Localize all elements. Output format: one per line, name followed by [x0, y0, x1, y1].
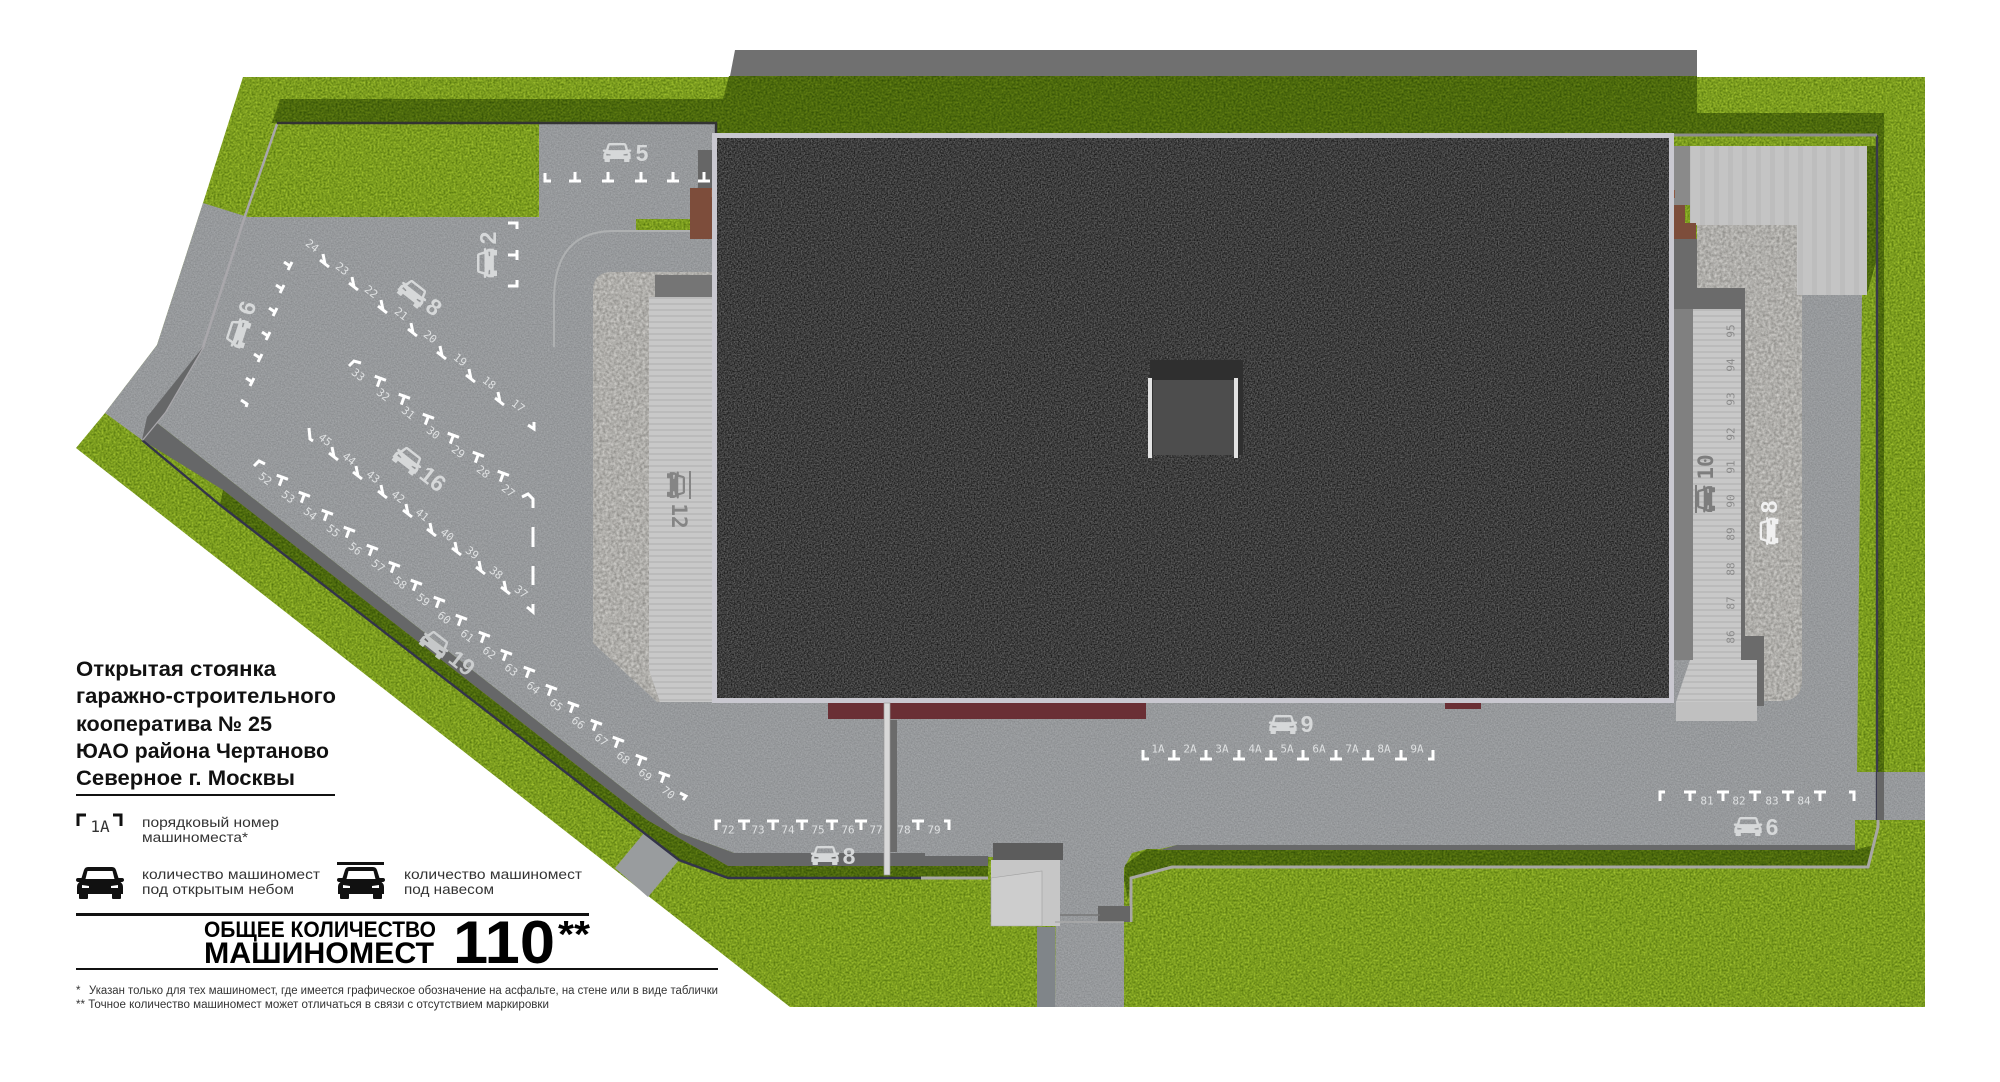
canopy labels 86-95: 95	[1724, 324, 1738, 338]
title rule	[76, 794, 335, 796]
row 24-17 labels: 21	[392, 305, 410, 323]
perimeter wall south-west	[142, 440, 921, 878]
row 24-17 labels: 17	[509, 397, 527, 415]
legend: spot number: машиноместа*	[142, 829, 249, 845]
small lawn strip at entrance	[636, 219, 690, 231]
count: 9	[1269, 711, 1313, 737]
east: gray upper alley	[1674, 146, 1690, 205]
row 72-79 labels: 74	[781, 824, 795, 836]
count: 9: 9	[1301, 711, 1313, 737]
count: 6 west	[224, 298, 261, 350]
row 1A-9A labels: 6A	[1312, 742, 1326, 756]
count: 19	[417, 627, 480, 681]
row 24-17 labels: 23	[333, 260, 351, 278]
courtyard shadow	[1150, 360, 1243, 455]
east: L-shaped canopy	[1690, 146, 1867, 295]
dark curb band south-west	[142, 423, 988, 866]
grass ground	[76, 77, 1925, 1007]
row 81-84 labels	[1700, 794, 1811, 808]
total heading: ОБЩЕЕ КОЛИЧЕСТВО	[204, 917, 436, 942]
canopy count: 10	[1694, 454, 1718, 513]
gatehouse shadow	[993, 843, 1063, 860]
stair west	[698, 150, 712, 188]
title block: Северное г. Москвы	[76, 767, 295, 790]
row 24-17 labels	[303, 237, 527, 415]
east: shaded under canopy	[1674, 309, 1693, 660]
row 52-70 labels: 55	[324, 522, 342, 540]
row 45-37 labels: 41	[413, 506, 431, 524]
row 24-17 labels: 22	[362, 283, 380, 301]
row 33-27 labels	[349, 366, 517, 500]
canopy labels 86-95: 89	[1724, 527, 1738, 541]
canopy count: 10: 10	[1694, 454, 1718, 480]
row 45-37 labels: 44	[340, 450, 359, 468]
row 1A-9A labels	[1151, 742, 1424, 756]
row 45-37 labels: 45	[316, 431, 334, 449]
row 1A-9A labels: 3A	[1215, 742, 1229, 756]
gravel bed west	[593, 272, 712, 702]
row 1A-9A markers	[1143, 750, 1433, 759]
gatehouse inner roof	[991, 871, 1042, 926]
row 81-84 labels: 83	[1765, 794, 1779, 808]
row 45-37 labels: 38	[487, 564, 505, 582]
roof surface	[717, 138, 1669, 698]
row 45-37 labels: 42	[389, 488, 407, 506]
canopy labels 86-95: 93	[1724, 392, 1738, 406]
row 33-27 labels: 33	[349, 366, 367, 384]
row 1A-9A labels: 2A	[1183, 742, 1197, 756]
canopy labels 86-95: 90	[1724, 494, 1738, 508]
row 52-70 labels	[256, 470, 677, 802]
building shadow on grass	[272, 76, 1884, 820]
row 52-70 labels: 52	[256, 470, 274, 488]
footnotes: Указан только для тех машиномест, где имеется графическое обозначение на асфальте, на стене или в виде таблички	[89, 985, 718, 997]
canopy shadow west	[655, 275, 712, 297]
south perimeter wall	[1131, 820, 1878, 922]
east: long canopy	[1693, 309, 1741, 660]
row 72-79 labels: 72	[721, 824, 735, 836]
row 72-79 labels: 78	[897, 824, 911, 836]
canopy west	[649, 297, 712, 702]
east: stair canopy upper	[1676, 660, 1757, 702]
count: 8 on gravel: 8	[1756, 500, 1782, 513]
brick tab west	[711, 190, 719, 197]
row 72-79 labels: 79	[927, 824, 941, 836]
row 52-70 labels: 68	[614, 749, 632, 767]
footnotes	[76, 985, 718, 1011]
legend: under canopy	[337, 862, 583, 899]
entrance boundary	[1055, 921, 1124, 923]
east: shade right of L canopy	[1867, 146, 1877, 294]
total rule top	[76, 913, 589, 916]
row 52-70 labels: 56	[346, 540, 364, 558]
south shaded grass	[1124, 845, 1873, 900]
asphalt driveway	[105, 123, 1925, 1007]
title block: ЮАО района Чертаново	[76, 740, 329, 763]
east: brick tab	[1668, 190, 1675, 198]
total heading: МАШИНОМЕСТ	[204, 937, 434, 970]
north-east wall	[1674, 134, 1877, 136]
row 52-70 labels: 60	[435, 609, 453, 627]
legend: under canopy: под навесом	[404, 881, 494, 897]
count: 8 south: 8	[843, 843, 856, 869]
row 45-37 labels: 37	[512, 583, 530, 601]
title block	[76, 658, 336, 790]
row 52-70 labels: 59	[414, 591, 432, 609]
courtyard wall right	[1234, 378, 1238, 458]
total number: **	[558, 914, 590, 956]
courtyard floor	[1153, 380, 1237, 455]
gate bar	[1060, 914, 1100, 916]
canopy labels 86-95: 91	[1724, 460, 1738, 474]
count: 8 south	[811, 843, 856, 869]
legend: open sky: количество машиномест	[142, 866, 321, 882]
legend: spot number: 1A	[90, 817, 110, 836]
count: 19: 19	[444, 645, 480, 681]
building roof	[714, 136, 1672, 700]
total heading	[204, 917, 436, 970]
row 45-37 labels: 39	[463, 544, 481, 562]
row 45-37 labels: 40	[438, 526, 456, 544]
row 52-70 markers	[254, 461, 686, 800]
canopy labels 86-95: 86	[1724, 630, 1738, 644]
row 52-70 labels: 69	[636, 766, 654, 784]
canopy label 12: 12	[667, 503, 691, 529]
gatehouse roof	[991, 860, 1060, 926]
brick porch west	[690, 188, 712, 239]
row 24-17 labels: 24	[303, 237, 322, 255]
row 72-79 labels: 73	[751, 824, 765, 836]
total rule bottom	[76, 968, 718, 970]
footnotes: *	[76, 985, 81, 997]
count: 6 east	[1734, 814, 1778, 840]
row 45-37 labels	[316, 431, 530, 601]
row 33-27 labels: 32	[374, 386, 392, 404]
row 72-79 labels: 77	[869, 824, 883, 836]
count: 2	[475, 232, 501, 278]
maroon awning south	[828, 703, 1146, 719]
entrance strip	[1037, 927, 1055, 1007]
east: brick porch	[1674, 205, 1696, 239]
row 52-70 labels: 57	[369, 557, 387, 575]
row 45-37 markers	[309, 428, 510, 594]
west markers	[241, 262, 292, 407]
building side facade	[730, 50, 1697, 76]
light wall segment	[921, 876, 988, 880]
row 1A-9A labels: 4A	[1248, 742, 1262, 756]
row 81-84 labels: 84	[1797, 794, 1811, 808]
legend: under canopy: количество машиномест	[404, 866, 583, 882]
count: 6 east: 6	[1766, 814, 1778, 840]
row 72-79 labels: 76	[841, 824, 855, 836]
legend: spot number: порядковый номер	[142, 814, 279, 830]
south curb band	[1160, 845, 1855, 850]
east perimeter wall	[1876, 135, 1878, 820]
canopy labels 86-95: 94	[1724, 358, 1738, 372]
curved road line	[554, 231, 690, 347]
row 33-27 labels: 28	[474, 463, 492, 481]
row 52-70 labels: 70	[659, 784, 677, 802]
row 1A-9A labels: 5A	[1280, 742, 1294, 756]
maroon awning small	[1445, 703, 1481, 709]
row 52-70 labels: 54	[301, 505, 320, 523]
canopy label 12	[667, 471, 691, 529]
row 81-84 labels: 81	[1700, 794, 1714, 808]
count: 8 angled	[395, 276, 447, 321]
row 72-79 labels	[721, 824, 941, 836]
east road shadow across exit	[1877, 772, 1884, 820]
fence on west side	[142, 124, 277, 440]
total number: 110	[453, 909, 555, 976]
row 72-79 labels: 75	[811, 824, 825, 836]
row 45-37 labels: 43	[364, 468, 382, 486]
row 1A-9A labels: 1A	[1151, 742, 1165, 756]
row 52-70 labels: 66	[569, 714, 587, 732]
pedestrian path across the lawn	[615, 833, 679, 897]
row 24-17 labels: 18	[480, 374, 498, 392]
count: 16: 16	[415, 461, 451, 497]
entrance gate	[1098, 906, 1130, 922]
row 52-70 labels: 67	[592, 731, 610, 749]
count: 6 west: 6	[233, 298, 261, 318]
top perimeter wall	[277, 123, 716, 133]
count: 16	[390, 443, 451, 497]
east: dark side shadow	[1674, 239, 1764, 706]
legend: spot number	[78, 814, 279, 845]
wall shadow wedge on west side	[142, 347, 203, 440]
title block: гаражно-строительного	[76, 685, 336, 708]
footnotes: ** Точное количество машиномест может отличаться в связи с отсутствием маркировки	[76, 999, 549, 1011]
row 52-70 labels: 53	[279, 488, 297, 506]
row 81-84 markers	[1660, 792, 1854, 801]
row 33-27 labels: 29	[449, 443, 467, 461]
row 52-70 labels: 63	[502, 661, 520, 679]
white column pipe	[884, 703, 890, 875]
row 2 markers	[508, 223, 517, 286]
row 24-17 labels: 20	[421, 328, 439, 346]
row 24-17 markers	[320, 254, 534, 429]
dark column shade	[890, 720, 897, 852]
east: gravel bed	[1697, 225, 1802, 701]
title block: кооператива № 25	[76, 713, 272, 736]
count: 5: 5	[636, 140, 649, 166]
row 52-70 labels: 58	[391, 574, 409, 592]
east: stair canopy lower	[1676, 702, 1757, 721]
row 1A-9A labels: 7A	[1345, 742, 1359, 756]
row 33-27 labels: 30	[424, 424, 442, 442]
row 33-27 markers	[349, 361, 533, 612]
canopy labels 86-95: 92	[1724, 427, 1738, 441]
row 72-79 markers	[716, 821, 949, 830]
count: 5	[603, 140, 649, 166]
row 1A-9A labels: 9A	[1410, 742, 1424, 756]
row 52-70 labels: 61	[458, 627, 476, 645]
legend: open sky: под открытым небом	[142, 881, 294, 897]
legend: open sky	[76, 866, 321, 899]
row 1A-9A labels: 8A	[1377, 742, 1391, 756]
count: 8 on gravel	[1756, 500, 1782, 545]
title block: Открытая стоянка	[76, 658, 276, 681]
canopy labels 86-95: 87	[1724, 596, 1738, 610]
count: 2: 2	[475, 232, 501, 244]
shaded grass strip south-west	[220, 490, 988, 878]
row 52-70 labels: 65	[547, 696, 565, 714]
count: 8 angled: 8	[421, 293, 447, 321]
canopy labels 86-95: 88	[1724, 562, 1738, 576]
row 5 markers	[545, 172, 710, 181]
courtyard wall left	[1148, 378, 1152, 458]
row 52-70 labels: 64	[524, 679, 543, 697]
row 24-17 labels: 19	[451, 351, 469, 369]
canopy labels 86-95	[1724, 324, 1738, 644]
row 33-27 labels: 27	[499, 482, 517, 500]
row 52-70 labels: 62	[480, 644, 498, 662]
row 81-84 labels: 82	[1732, 794, 1746, 808]
row 33-27 labels: 31	[399, 404, 417, 422]
